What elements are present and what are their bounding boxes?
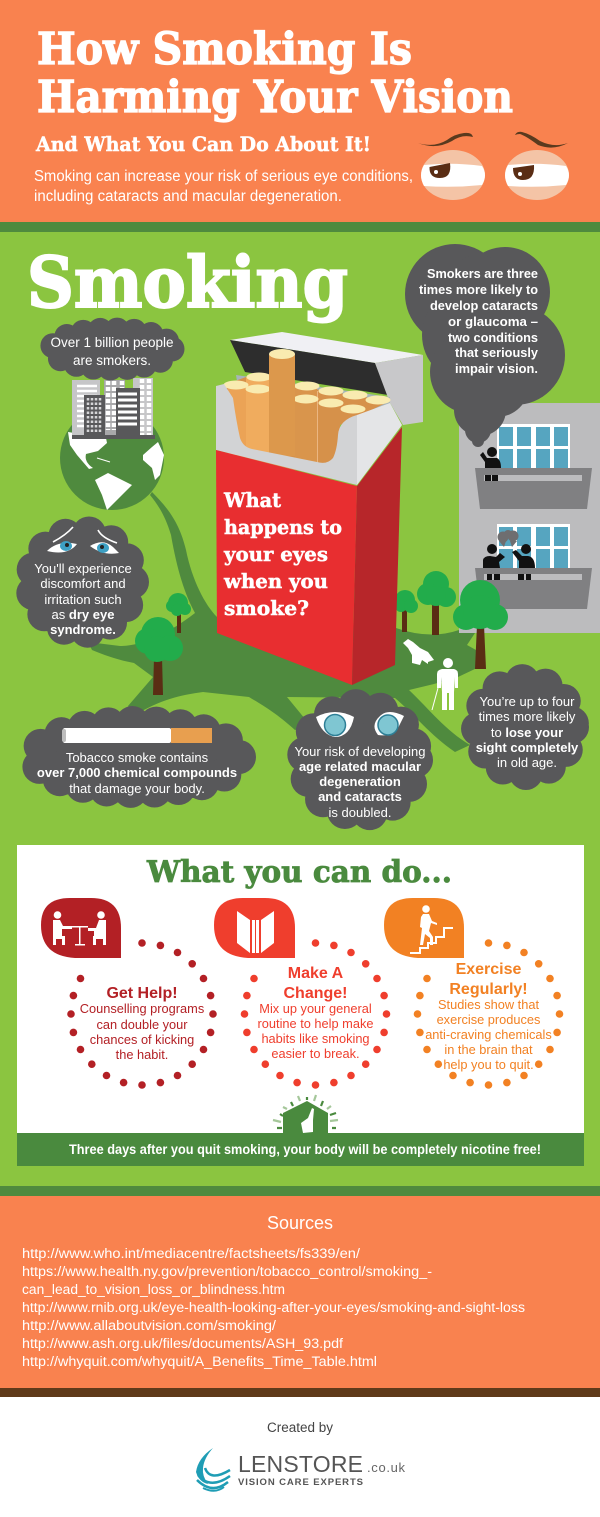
callout: macular degeneration [294,707,426,820]
buildings [72,378,155,439]
callout: lose sight: You’re up to four [480,694,575,709]
text: make a change: habits like smoking [261,1031,370,1046]
text: get help: chances of kicking [90,1032,194,1047]
callout: dry eye: syndrome. [50,622,116,637]
source links: http://www.who.int/mediacentre/factsheets/fs339/en/ [22,1246,360,1261]
text: make a change: easier to break. [271,1046,360,1061]
balcony smoke [498,530,518,547]
text: exercise: Studies show that [438,997,539,1012]
dotted ring [241,939,390,1089]
pack question: your eyes [223,542,328,566]
callout: cataracts or glaucoma [405,244,565,447]
callout: dry eye: as dry eye [52,607,114,622]
banner: nicotine free: Three days after you quit smoking, your body will be completely nicotine free! [69,1142,541,1157]
callout: chemical compounds [35,723,239,796]
callout: lose sight: to lose your [491,725,563,740]
ground paths [88,492,477,752]
callout: lose sight: times more likely [479,709,576,724]
icon: thumbs up house [273,1095,338,1133]
icon: blue eyes [316,712,404,737]
cigarette pack [216,332,423,685]
icon: dog [403,639,434,665]
callout: chemical compounds: Tobacco smoke contains [66,750,209,765]
callout: dry eye: irritation such [44,592,122,607]
text: get help: can double your [96,1017,188,1032]
pack inner flap [216,384,402,485]
callout: cataracts or glaucoma: times more likely to [419,283,538,297]
callout: macular degeneration: Your risk of developing [294,744,426,759]
text: make a change: routine to help make [258,1016,373,1031]
callout: cataracts or glaucoma: develop cataracts [430,299,538,313]
callout: macular degeneration: age related macular [299,759,421,774]
callout: lose sight: in old age. [497,755,557,770]
callout: lose sight: sight completely [476,740,579,755]
source links: can_lead_to_vision_loss_or_blindness.htm [22,1282,285,1297]
text: make a change [258,965,373,1061]
heading: smoking: Smoking [27,241,348,324]
text: get help: Counselling programs [80,1001,204,1016]
title [37,24,513,123]
callout: dry eye: discomfort and [40,576,126,591]
logo: lenstore [196,1448,406,1491]
pack front [216,450,357,685]
dotted ring [67,939,217,1089]
panel: smoking [0,232,600,1186]
callout: dry eye: You'll experience [34,561,132,576]
banner: nicotine free [17,1133,584,1166]
windows [497,424,570,570]
pack question: happens to [224,515,342,539]
callout: cataracts or glaucoma: that seriously [455,346,538,360]
text: exercise: anti-craving chemicals [425,1027,552,1042]
logo: lenstore: VISION CARE EXPERTS [238,1477,363,1488]
balconies [475,468,592,609]
text: make a change: Mix up your general [259,1001,372,1016]
panel: sources [0,1186,600,1397]
panel: what you can do [17,845,584,1166]
callout: billion smokers: Over 1 billion people [50,335,174,350]
text: make a change: Make A [288,965,344,982]
title: How Smoking Is [37,24,412,75]
icon: city on globe [60,378,164,510]
text: exercise: help you to quit. [443,1057,534,1072]
icon: cigarette [62,728,212,743]
text: exercise: exercise produces [437,1012,540,1027]
callout: chemical compounds: over 7,000 chemical compounds [37,765,237,780]
source links [22,1246,525,1369]
pack question: What [223,488,282,512]
source links: https://www.health.ny.gov/prevention/tobacco_control/smoking_- [22,1264,432,1279]
text: make a change: Change! [284,985,348,1002]
text: get help: the habit. [116,1047,168,1062]
card: make a change [214,898,390,1089]
icon: counselling [41,898,121,958]
pack lid [230,332,423,425]
logo: lenstore: LENSTORE [238,1451,363,1477]
callout: cataracts or glaucoma: impair vision. [455,362,538,376]
callout: dry eye [32,527,132,637]
text: get help [80,985,204,1062]
pack question: smoke? [224,596,309,620]
intro text: Smoking can increase your risk of serious eye conditions, [34,168,413,185]
dotted ring [414,939,563,1089]
callout: billion smokers: are smokers. [73,353,151,368]
icon: stairs [384,898,464,958]
source links: http://www.allaboutvision.com/smoking/ [22,1318,276,1333]
title: Harming Your Vision [37,72,513,123]
heading: sources: Sources [267,1213,333,1233]
subtitle: And What You Can Do About It! [35,132,371,156]
logo: lenstore: .co.uk [367,1460,406,1475]
pack question [223,488,342,620]
text: get help: Get Help! [106,985,178,1002]
callout: macular degeneration: degeneration [319,774,401,789]
icon: swirl [196,1448,230,1491]
callout: macular degeneration: is doubled. [329,805,391,820]
card: exercise [384,898,563,1089]
callout: cataracts or glaucoma: Smokers are three [427,267,538,281]
text: exercise: Exercise [456,961,522,978]
callout: cataracts or glaucoma: or glaucoma – [448,315,538,329]
panel: header [0,0,600,232]
callout: lose sight [476,681,579,773]
callout: cataracts or glaucoma: two conditions [448,331,538,345]
icon: tired eyes [418,132,569,200]
text: exercise: Regularly! [449,981,528,998]
source links: http://whyquit.com/whyquit/A_Benefits_Time_Table.html [22,1354,377,1369]
smokers on balconies [480,447,535,580]
intro text [34,168,413,205]
icon: irritated eyes [47,527,119,554]
credit: created by: Created by [267,1420,333,1435]
pack question: when you [223,569,328,593]
icon: book [214,898,295,958]
source links: http://www.ash.org.uk/files/documents/ASH_93.pdf [22,1336,343,1351]
building [459,403,600,633]
text: exercise: in the brain that [444,1042,533,1057]
callout: billion smokers [50,330,174,368]
icon: person with cane [432,658,458,710]
cigarettes [224,349,390,470]
callout: macular degeneration: and cataracts [318,789,402,804]
callout: chemical compounds: that damage your body. [69,781,205,796]
heading: what you can do: What you can do... [146,855,452,890]
pack side [352,427,402,685]
source links: http://www.rnib.org.uk/eye-health-looking-after-your-eyes/smoking-and-sight-loss [22,1300,525,1315]
intro text: including cataracts and macular degeneration. [34,188,342,205]
text: exercise [425,961,552,1072]
trees [135,571,508,695]
card: get help [41,898,217,1089]
globe [60,406,164,510]
